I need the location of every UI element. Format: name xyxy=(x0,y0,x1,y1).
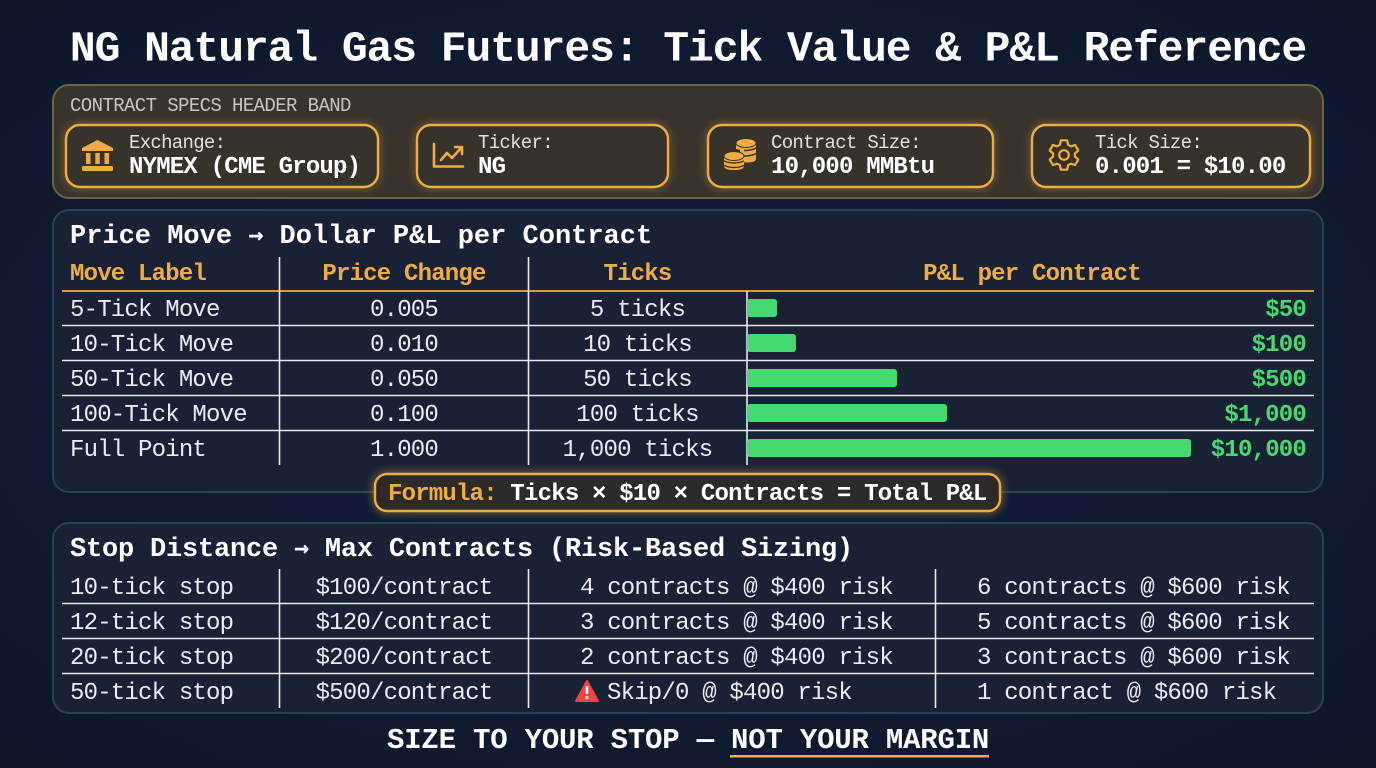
row: 5-tick move: 5 ticks xyxy=(590,297,685,324)
row: 100-tick move: 100-Tick Move xyxy=(70,402,247,429)
row: 12-tick stop: 3 contracts @ $400 risk xyxy=(580,610,893,637)
spec card: contract size: 10,000 MMBtu xyxy=(771,154,934,181)
row: 100-tick move xyxy=(70,402,1306,429)
table header xyxy=(70,261,1141,288)
title: NG Natural Gas Futures: Tick Value & P&L Reference xyxy=(70,24,1306,74)
row: 12-tick stop xyxy=(70,610,1290,637)
row: full point: 1.000 xyxy=(370,437,438,464)
row: 100-tick move: 100 ticks xyxy=(576,402,699,429)
spec card: tick size: 0.001 = $10.00 xyxy=(1095,154,1286,181)
row: 10-tick stop xyxy=(70,575,1290,602)
callout: formula: Formula: Ticks × $10 × Contracts = Total P&L xyxy=(388,481,987,508)
spec card: exchange xyxy=(66,125,378,187)
row: 5-tick move: 0.005 xyxy=(370,297,438,324)
row: 5-tick move: $50 xyxy=(1265,297,1306,324)
panel: contract specs header band xyxy=(53,85,1323,198)
row: 20-tick stop xyxy=(70,645,1290,672)
row: 12-tick stop: 12-tick stop xyxy=(70,610,233,637)
spec card: tick size: Tick Size: xyxy=(1095,132,1202,154)
row: full point: $10,000 xyxy=(1211,437,1306,464)
row: 50-tick stop: Skip/0 @ $400 risk xyxy=(607,680,852,707)
row: full point xyxy=(70,437,1306,464)
spec card: tick size xyxy=(1032,125,1310,187)
spec card: ticker: Ticker: xyxy=(478,132,553,154)
row: 10-tick move: 10-Tick Move xyxy=(70,332,233,359)
row: 10-tick stop: $100/contract xyxy=(316,575,492,602)
row: 5-tick move xyxy=(70,297,1306,324)
row: 20-tick stop: 20-tick stop xyxy=(70,645,233,672)
row: full point: Full Point xyxy=(70,437,206,464)
panel: price move to dollar P&L xyxy=(53,210,1323,492)
row: 10-tick stop: 6 contracts @ $600 risk xyxy=(977,575,1290,602)
row: 12-tick stop: 5 contracts @ $600 risk xyxy=(977,610,1290,637)
row: 10-tick move: 10 ticks xyxy=(583,332,692,359)
row: 10-tick stop: 10-tick stop xyxy=(70,575,233,602)
icon: bank building xyxy=(82,140,113,171)
row: 10-tick move: $100 xyxy=(1252,332,1306,359)
icon: coins xyxy=(724,138,756,170)
row: 50-tick move: $500 xyxy=(1252,367,1306,394)
spec card: exchange: NYMEX (CME Group) xyxy=(129,154,360,181)
row: 50-tick stop xyxy=(70,680,1277,707)
heading: price move: Price Move → Dollar P&L per Contract xyxy=(70,220,652,252)
row: 50-tick move xyxy=(70,367,1306,394)
table header: Move Label xyxy=(70,261,206,288)
row: 50-tick stop: $500/contract xyxy=(316,680,492,707)
heading: stop distance: Stop Distance → Max Contracts (Risk-Based Sizing) xyxy=(70,533,853,565)
row: 20-tick stop: 2 contracts @ $400 risk xyxy=(580,645,893,672)
row: 12-tick stop: $120/contract xyxy=(316,610,492,637)
footer slogan: SIZE TO YOUR STOP — NOT YOUR MARGIN xyxy=(387,724,989,757)
spec card: contract size: Contract Size: xyxy=(771,132,921,154)
row: 20-tick stop: 3 contracts @ $600 risk xyxy=(977,645,1290,672)
table header: P&L per Contract xyxy=(923,261,1141,288)
row: 50-tick move: 50-Tick Move xyxy=(70,367,233,394)
row: 100-tick move: $1,000 xyxy=(1224,402,1306,429)
spec card: ticker xyxy=(417,125,668,187)
band label: CONTRACT SPECS HEADER BAND xyxy=(70,95,351,117)
panel: stop distance to max contracts xyxy=(53,523,1323,713)
row: 50-tick move: 50 ticks xyxy=(583,367,692,394)
spec card: exchange: Exchange: xyxy=(129,132,225,154)
row: 50-tick stop: 50-tick stop xyxy=(70,680,233,707)
row: 10-tick move: 0.010 xyxy=(370,332,438,359)
row: full point: 1,000 ticks xyxy=(563,437,712,464)
row: 50-tick move: 0.050 xyxy=(370,367,438,394)
icon: gear xyxy=(1050,140,1078,170)
row: 100-tick move: 0.100 xyxy=(370,402,438,429)
row: 50-tick stop: 1 contract @ $600 risk xyxy=(977,680,1277,707)
table header: Price Change xyxy=(322,261,486,288)
icon: line chart xyxy=(434,144,463,166)
callout: formula xyxy=(375,474,1000,511)
row: 10-tick stop: 4 contracts @ $400 risk xyxy=(580,575,893,602)
row: 10-tick move xyxy=(70,332,1306,359)
row: 5-tick move: 5-Tick Move xyxy=(70,297,220,324)
icon: warning triangle xyxy=(576,681,598,701)
spec card: contract size xyxy=(708,125,993,187)
table header: Ticks xyxy=(603,261,672,288)
spec card: ticker: NG xyxy=(478,154,506,181)
row: 20-tick stop: $200/contract xyxy=(316,645,492,672)
